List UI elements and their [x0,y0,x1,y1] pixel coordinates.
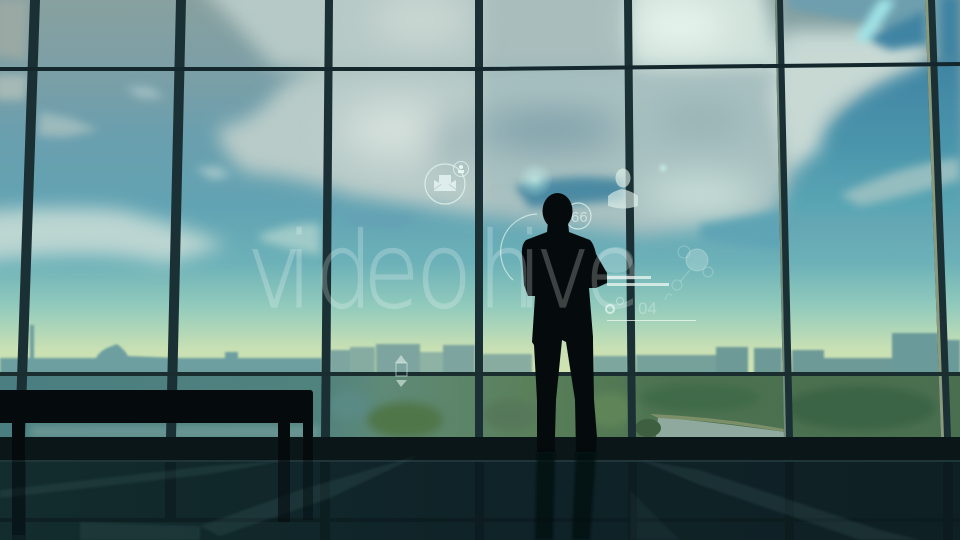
icon: circle with number [565,203,591,229]
icon: house arrow [395,355,407,387]
icon: envelope circle [425,162,468,204]
bench [0,390,313,535]
deep blue sky at right [790,55,960,215]
vertical mullions [15,0,40,437]
trees and river [0,373,960,439]
top-right blue patch [785,0,960,60]
highlights and shadows [630,0,730,50]
icon: molecule [665,246,713,300]
icon: small gears and number [606,298,657,318]
watermark: videohive [247,211,641,332]
mullion highlights [925,0,944,437]
floor [0,437,960,540]
number: 04 [638,299,657,318]
person silhouette [522,193,607,452]
low left cloud [0,208,226,264]
right diagonal cloud [770,30,930,170]
icon: large arc [501,214,537,280]
floating interface icons [395,162,713,387]
small wisps [0,75,28,100]
top centre cloud [195,0,480,68]
icon: person [608,168,638,208]
bars [607,276,696,321]
floor reflections [0,462,960,540]
mid centre cloud [218,70,480,215]
light streaks [0,455,920,540]
clouds [0,0,960,264]
upper right panes [480,0,640,68]
horizontal transoms [0,62,960,71]
blue band near head [515,177,625,208]
silhouette reflection [535,452,596,540]
city skyline [0,325,960,375]
number: 66 [571,209,588,226]
sky background [0,0,960,375]
flare [517,162,553,198]
blob behind bars [599,247,633,273]
